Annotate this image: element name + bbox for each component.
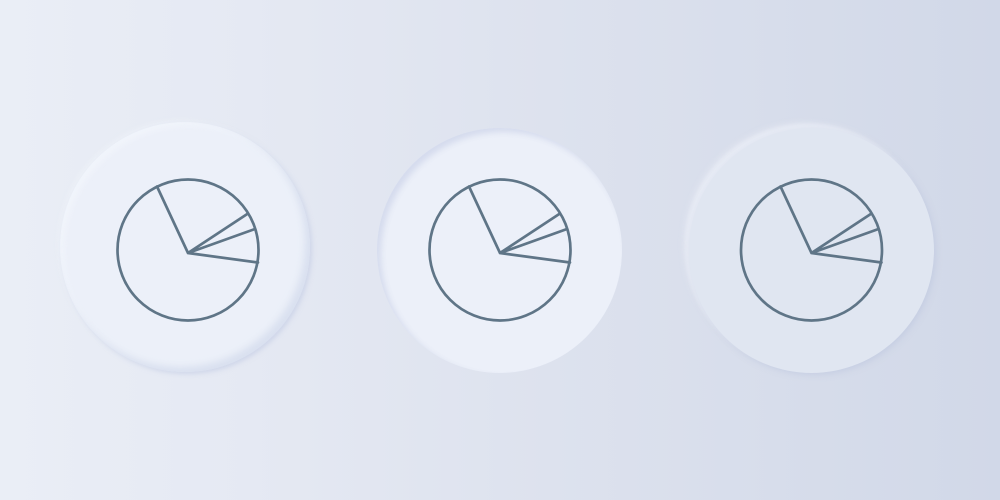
icon: pie chart 3	[741, 180, 882, 320]
button 2: inset disc	[377, 128, 622, 373]
icon: pie chart 2	[430, 180, 570, 320]
button 3: flat disc with highlight	[689, 128, 934, 373]
button 1: raised disc	[60, 122, 310, 372]
icon: pie chart 1	[118, 180, 258, 320]
